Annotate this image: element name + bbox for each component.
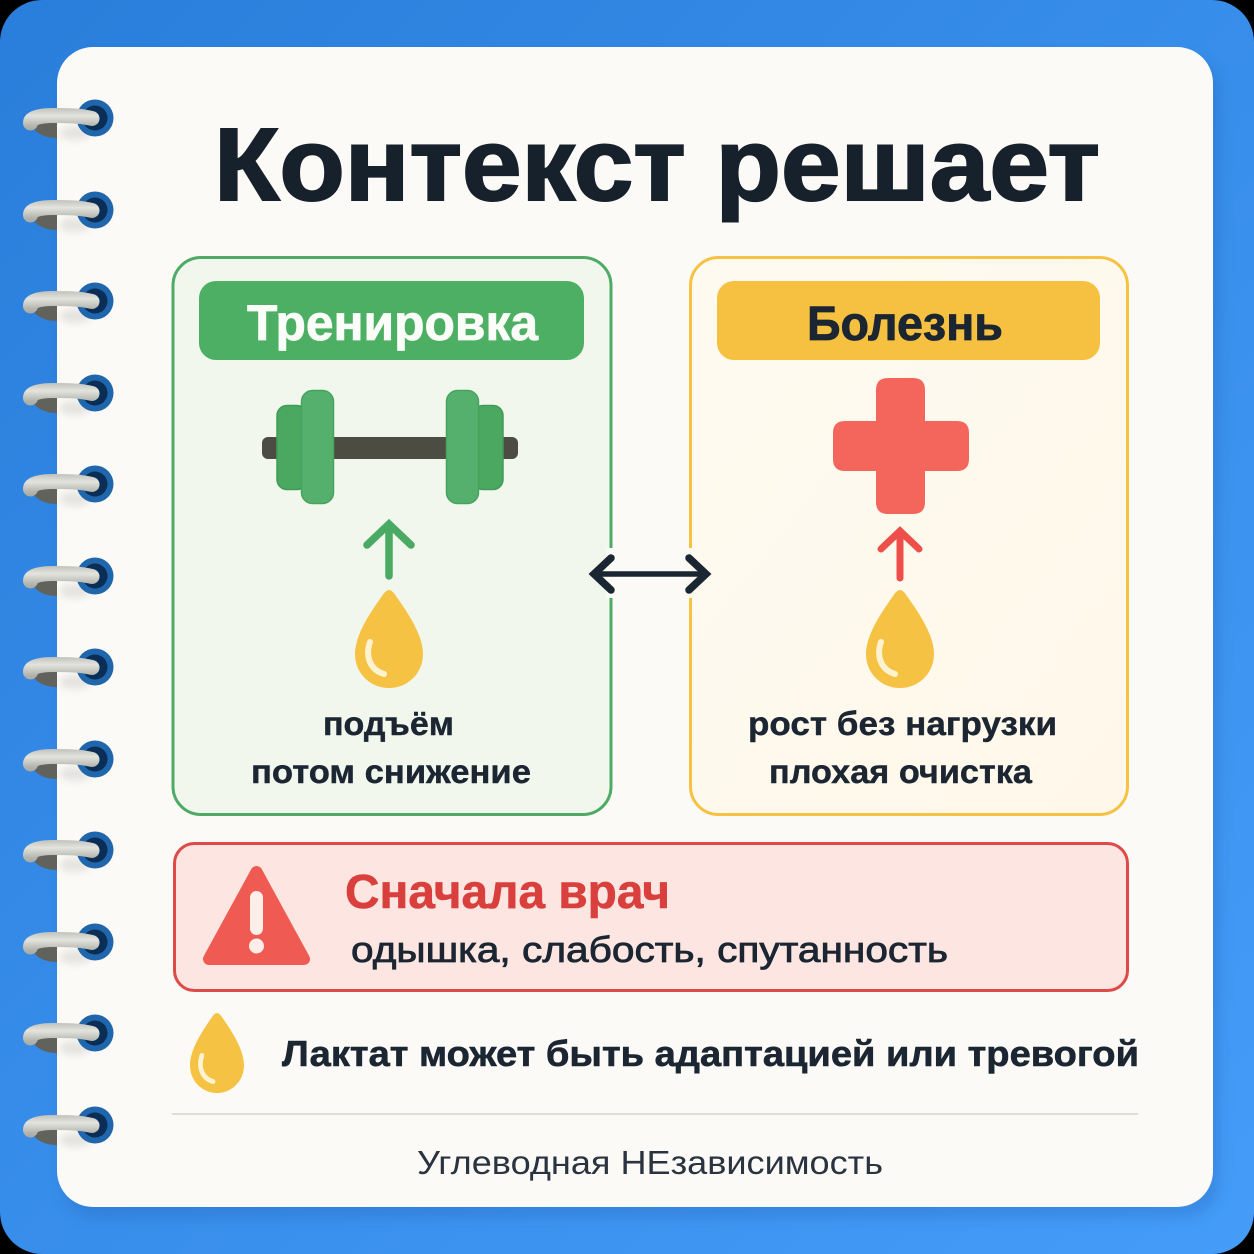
text: symptoms: одышка, слабость, спутанность <box>351 929 948 970</box>
icon: small lactate drop <box>190 1013 244 1093</box>
arrow: up red <box>881 531 919 578</box>
icon: medical cross <box>833 378 969 514</box>
icon: warning triangle <box>209 872 304 959</box>
text: growth without load: рост без нагрузки <box>748 705 1057 742</box>
text: rise then fall <box>251 705 531 790</box>
takeaway text: Лактат может быть адаптацией или тревогой <box>282 1033 1139 1074</box>
text: rise then fall: потом снижение <box>251 753 531 790</box>
text: rise then fall: подъём <box>323 705 454 742</box>
heading: training: Тренировка <box>247 295 539 351</box>
icon: barbell <box>262 390 518 504</box>
panel: training <box>173 258 611 814</box>
title: Контекст решает <box>214 107 1100 222</box>
spiral binding rings <box>30 100 114 1147</box>
icon: lactate drop <box>355 590 423 688</box>
icon: lactate drop <box>866 590 934 688</box>
panel: illness <box>690 258 1128 814</box>
text: growth without load <box>748 705 1057 790</box>
text: growth without load: плохая очистка <box>769 753 1033 790</box>
arrow: double comparison <box>594 548 706 598</box>
heading: illness <box>717 281 1100 360</box>
footer: Углеводная НЕзависимость <box>417 1144 883 1181</box>
heading: doctor first: Сначала врач <box>345 866 670 919</box>
panel: doctor warning <box>174 844 1128 990</box>
heading: illness: Болезнь <box>807 298 1003 351</box>
heading: training <box>199 281 584 360</box>
arrow: up green <box>367 524 411 576</box>
